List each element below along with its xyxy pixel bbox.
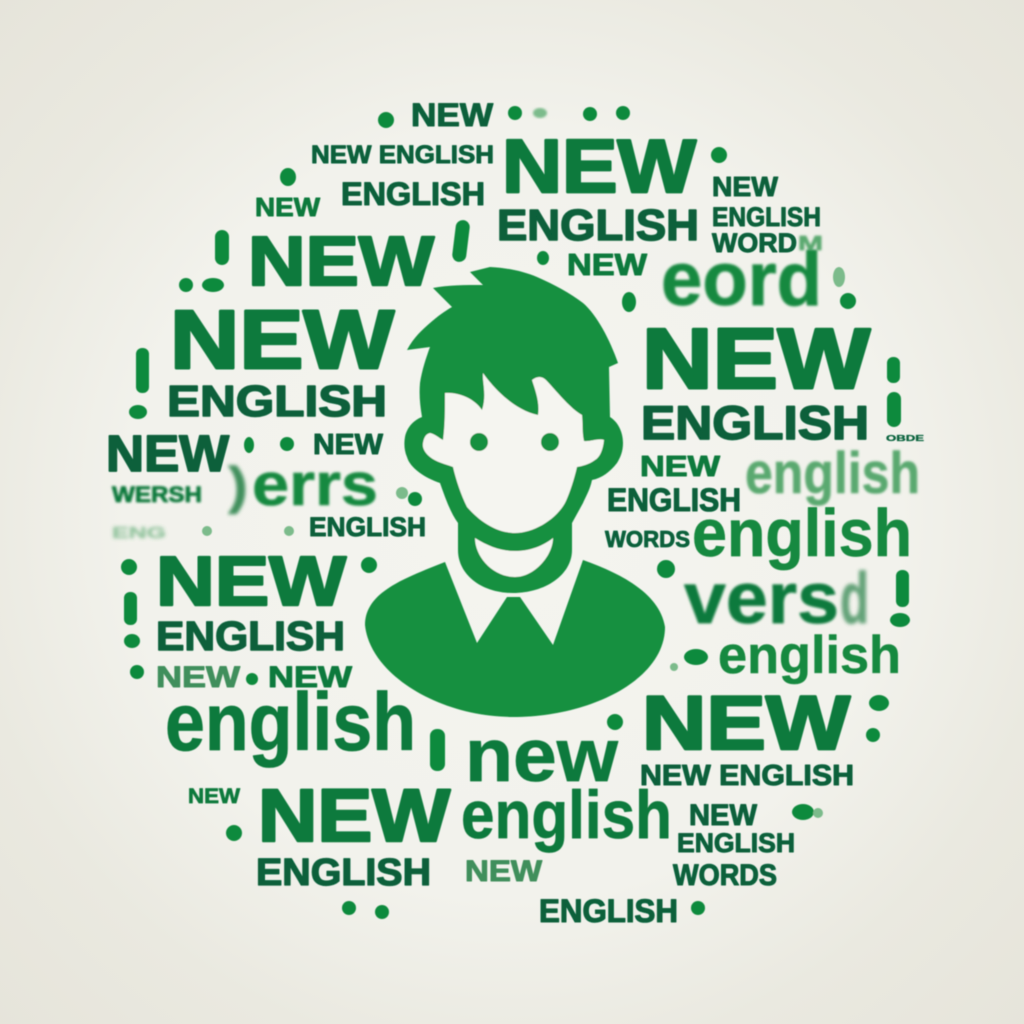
word: big NEW right: NEW xyxy=(642,312,871,407)
word: ENGLISH top left: ENGLISH xyxy=(341,176,485,212)
person: head, hair, ears and neck silhouette xyxy=(404,267,623,593)
word: fragment before errs: ) xyxy=(228,457,248,515)
word: NEW above head right: NEW xyxy=(567,247,648,282)
word: NEW pale: NEW xyxy=(156,661,241,694)
word: NEW right of neck: NEW xyxy=(640,451,721,483)
word: NEW lower left: NEW xyxy=(156,542,346,620)
person: neck opening xyxy=(475,538,553,577)
icon: person with green hair and sweater xyxy=(365,267,665,717)
word: NEW lower right: NEW xyxy=(642,681,850,766)
word: NEW bottom right: NEW xyxy=(689,799,758,832)
word: english right: english xyxy=(692,496,912,571)
word: faded glyph after WORD: M xyxy=(798,233,823,255)
word: NEW top right: NEW xyxy=(712,171,779,202)
word: faded d after vers: d xyxy=(840,559,869,639)
word: ENGLISH left: ENGLISH xyxy=(167,377,387,426)
word: ENGLISH right of neck: ENGLISH xyxy=(607,482,741,518)
word: WERSH: WERSH xyxy=(112,482,202,507)
word: ENGLISH top right: ENGLISH xyxy=(712,202,821,232)
word: NEW small middle left: NEW xyxy=(313,429,384,461)
word: small NEW top left: NEW xyxy=(255,192,320,222)
word: english lower left: english xyxy=(165,677,416,768)
words: NEW ENGLISH lower right: NEW ENGLISH xyxy=(640,760,854,792)
word: ENGLISH bottom: ENGLISH xyxy=(539,893,678,929)
person: left eye xyxy=(470,433,488,451)
word: english pale: english xyxy=(745,441,920,506)
word: NEW bottom left: NEW xyxy=(258,774,450,857)
word: ENGLISH small left: ENGLISH xyxy=(309,512,426,542)
person: sweater body with collar cut-out xyxy=(365,560,665,717)
word: large NEW top: NEW xyxy=(502,124,696,208)
words: NEW ENGLISH top: NEW ENGLISH xyxy=(311,141,494,169)
word: new lower case: new xyxy=(465,713,619,797)
word: english bottom centre: english xyxy=(461,777,672,853)
word: ENGLISH lower left: ENGLISH xyxy=(156,613,345,659)
word: WORDS bottom right: WORDS xyxy=(673,859,777,892)
person: white face with fringe xyxy=(423,373,604,533)
word: ENGLISH right: ENGLISH xyxy=(641,396,869,449)
word: eord: eord xyxy=(661,237,822,322)
word: english lower right: english xyxy=(718,626,901,685)
word: blurred fragment left: ENG xyxy=(112,525,166,542)
word: NEW bottom centre: NEW xyxy=(465,855,543,888)
word: ENGLISH top centre: ENGLISH xyxy=(497,201,699,250)
word: WORD top right: WORD xyxy=(712,228,797,258)
person: right eye xyxy=(541,433,559,451)
word: NEW second: NEW xyxy=(268,661,353,694)
word: NEW tiny bottom left: NEW xyxy=(188,785,240,808)
word: ENGLISH bottom right: ENGLISH xyxy=(677,828,795,858)
word: WORDS right of neck: WORDS xyxy=(605,526,690,552)
word: tiny fragment right: OBDE xyxy=(886,434,925,443)
word: NEW far left: NEW xyxy=(106,425,230,482)
word: NEW top: NEW xyxy=(411,97,494,133)
word: NEW upper left: NEW xyxy=(248,222,434,300)
word: ENGLISH bottom left: ENGLISH xyxy=(256,852,431,894)
word cloud: all words xyxy=(106,97,925,929)
word: errs blurred: errs xyxy=(252,451,378,518)
word: big NEW left: NEW xyxy=(170,293,395,386)
word: vers: vers xyxy=(684,559,839,639)
decorative dots and exclamation marks xyxy=(121,106,910,919)
